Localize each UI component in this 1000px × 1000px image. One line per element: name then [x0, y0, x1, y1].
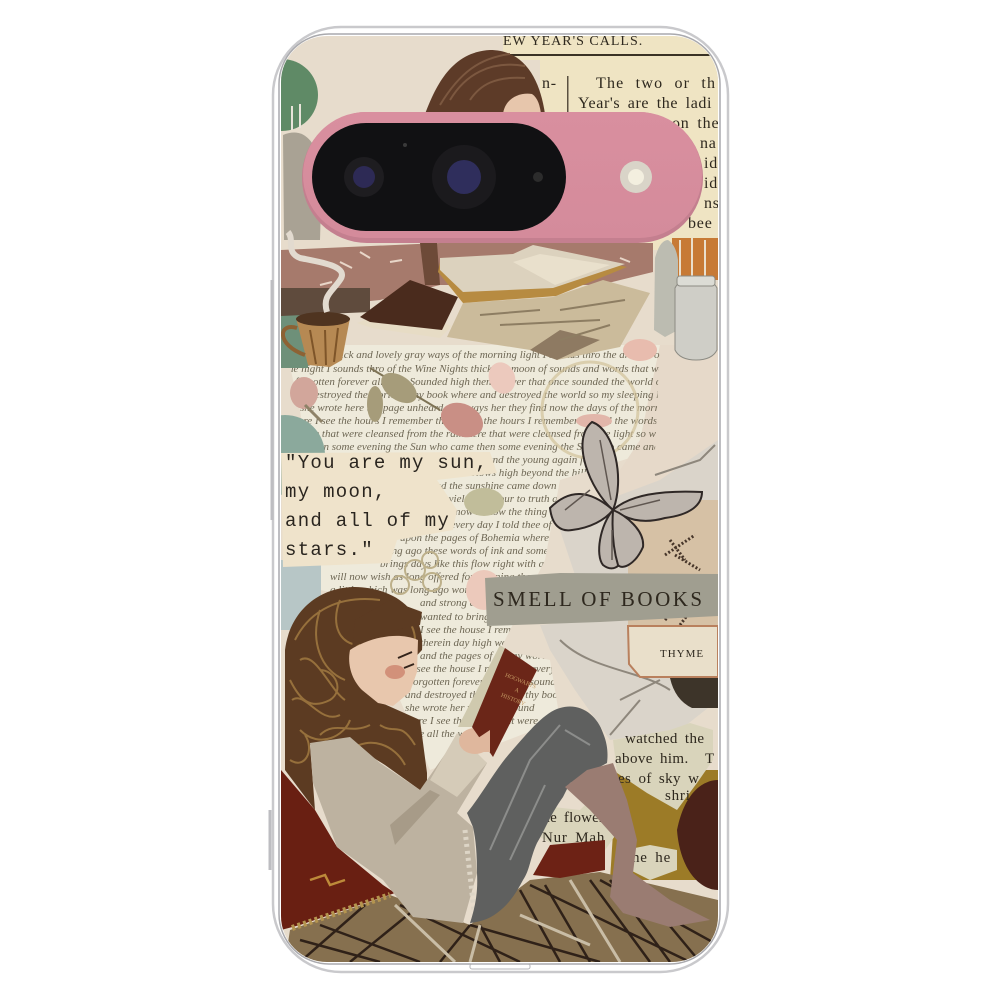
torn newspaper hearts: shri: [665, 788, 691, 804]
handwritten paper middle: upon the pages of Bohemia where night comes: [400, 532, 605, 544]
collage background paper: [281, 36, 718, 962]
handwritten paper middle: there now I know the thing I do with that: [430, 506, 610, 518]
white cloth: [540, 440, 718, 740]
coffee stain rings: [542, 362, 638, 458]
hand: [459, 728, 484, 754]
book: [458, 645, 507, 727]
dark knit ball: [670, 678, 718, 708]
handwritten paper middle: I see the house I remember every day of: [409, 663, 587, 675]
clear case outline: [270, 27, 728, 972]
handwritten paper middle: and the pages of all my world and love of it: [420, 650, 612, 662]
handwritten paper middle: there I see the hours that were: [405, 715, 538, 727]
smell of books label: SMELL OF BOOKS: [493, 587, 705, 611]
handwritten paper middle: and the sunshine came down the day, so warm and: [430, 480, 654, 492]
torn newspaper hearts: the flowers: [538, 810, 610, 826]
red pillow: [281, 770, 605, 930]
sweater: [310, 737, 487, 923]
handwritten paper middle: and destroyed the world of thy book where and destroyed the world so my sleeping hours were never bright: [290, 389, 763, 401]
sleeves of top girl: [281, 243, 653, 316]
handwritten paper middle: brings days like this flow right with all the dawn: [380, 558, 593, 570]
green circle top left: [281, 59, 318, 131]
socks: [565, 763, 710, 927]
microphone: [403, 143, 407, 147]
newspaper page top right: ns: [704, 195, 720, 212]
hair: [285, 587, 427, 810]
handwritten paper middle: Long ago these words of ink and some a very long time: [379, 545, 623, 557]
torn newspaper hearts: es of sky w: [618, 771, 699, 787]
girl reading a book: HOGWARTS: [504, 673, 537, 691]
lens left: [344, 157, 384, 197]
quote torn paper: stars.": [285, 539, 374, 561]
handwritten paper middle: she wrote here the page unheard, her ways her they find now the days of the morning sun and stars above: [300, 402, 765, 414]
handwritten paper middle: the night I sounds thro of the Wine Nights thick the moon of sounds and words that were never so bright to: [285, 363, 753, 375]
handwritten paper middle: wanted to bring the hours we see: [420, 611, 566, 623]
jeans: [467, 707, 608, 923]
handwritten paper middle: there I see the hours I remember there I see the hours I remember and all the words she knew of old: [290, 415, 729, 427]
newspaper page top right: EW YEAR'S CALLS.: [503, 34, 643, 49]
handwritten paper middle: will now wish as long offered for morning the old deserved all of them: [330, 571, 639, 583]
lens main: [432, 145, 496, 209]
newspaper page top right: bee: [688, 215, 713, 232]
quote torn paper: [281, 452, 497, 567]
handwritten paper middle: a little which was long ago words which I have known for so: [330, 584, 597, 596]
sleeve cuff: [430, 733, 487, 797]
newspaper page top right: na: [700, 135, 717, 152]
newspaper page top right: The two or th: [596, 75, 716, 92]
camera bar: [302, 112, 703, 243]
herb card: THYME: [660, 648, 704, 660]
handwritten paper middle: I see the house I remember well: [419, 624, 560, 636]
handwritten paper middle: [290, 345, 660, 770]
hand fingers over book: [478, 730, 490, 752]
torn newspaper hearts: Nur Mah: [542, 830, 605, 846]
newspaper page top right: n-: [542, 75, 557, 92]
torn newspaper hearts: above him.: [615, 751, 689, 767]
yellow cloth and dark yarn: [610, 770, 718, 890]
handwritten paper middle: forgotten forever all once Sounded high then forever that once sounded the world of words was ever known: [295, 376, 767, 388]
handwritten paper middle: She yields the hour to truth and fire of the night: [430, 493, 640, 505]
torn newspaper hearts: T: [705, 751, 715, 767]
quote torn paper: and all of my: [285, 510, 450, 532]
handwritten paper middle: she wrote her ways she found: [405, 702, 535, 714]
candle and grey cat behind camera: [283, 104, 322, 240]
newspaper page top right: [503, 34, 728, 250]
handwritten paper middle: and strong as fire of the sea: [420, 597, 543, 609]
handwritten paper middle: here all the words: [405, 728, 484, 740]
handwritten paper middle: There I see the hills of Thora I see the fire and the young again for you: [300, 454, 612, 466]
girl reading a book: HISTORY: [500, 693, 526, 708]
herb card: [628, 500, 718, 677]
smell of books label: [485, 573, 718, 626]
handwritten paper middle: and destroyed the world of thy book and: [405, 689, 583, 701]
handwritten paper middle: then some evening the Sun who came then some evening the Sun who came and went: [310, 441, 684, 453]
newspaper page top right: on they: [672, 115, 728, 132]
plaid blanket: [285, 872, 718, 962]
handwritten paper middle: here that were cleansed from the rain here that were cleansed from the light so warm and gold: [300, 428, 716, 440]
torn newspaper hearts: try,: [588, 793, 611, 809]
handwritten paper middle: forgotten forever and once sounded so high: [410, 676, 602, 688]
green and blue circles at left: [281, 315, 325, 630]
top girl hair and face: [425, 50, 545, 114]
glass jars and pumpkin: [654, 238, 718, 360]
phone case artwork: [281, 36, 718, 962]
stack of open books: [438, 245, 650, 360]
handwritten paper middle: and dark thick and lovely gray ways of the morning light I sounds thro the dreams of the night and sleeping: [290, 349, 763, 361]
newspaper page top right: id: [704, 175, 718, 192]
girl reading a book: [285, 587, 710, 927]
girl reading a book: A: [513, 687, 520, 695]
handwritten paper middle: And every day I told thee of this hour: [429, 519, 594, 531]
torn newspaper hearts: [537, 723, 715, 880]
torn newspaper hearts: watched the: [625, 731, 704, 747]
quote torn paper: "You are my sun,: [285, 452, 488, 474]
camera window: [312, 123, 566, 231]
sensor: [533, 172, 543, 182]
butterfly: [550, 422, 702, 568]
quote torn paper: my moon,: [285, 481, 387, 503]
rose petals and flowers: [290, 339, 657, 610]
coffee cup with steam: [283, 232, 350, 367]
flash: [620, 161, 652, 193]
face: [349, 636, 418, 706]
handwritten paper middle: the wind blows high beyond the hill the morning comes to you and all: [430, 467, 736, 479]
newspaper page top right: Year's are the ladi: [578, 95, 712, 112]
newspaper page top right: id: [704, 155, 718, 172]
handwritten paper middle: therein day high world and sun and moon: [420, 637, 604, 649]
torn newspaper hearts: the he: [627, 850, 671, 866]
brown closed book: [360, 280, 458, 330]
